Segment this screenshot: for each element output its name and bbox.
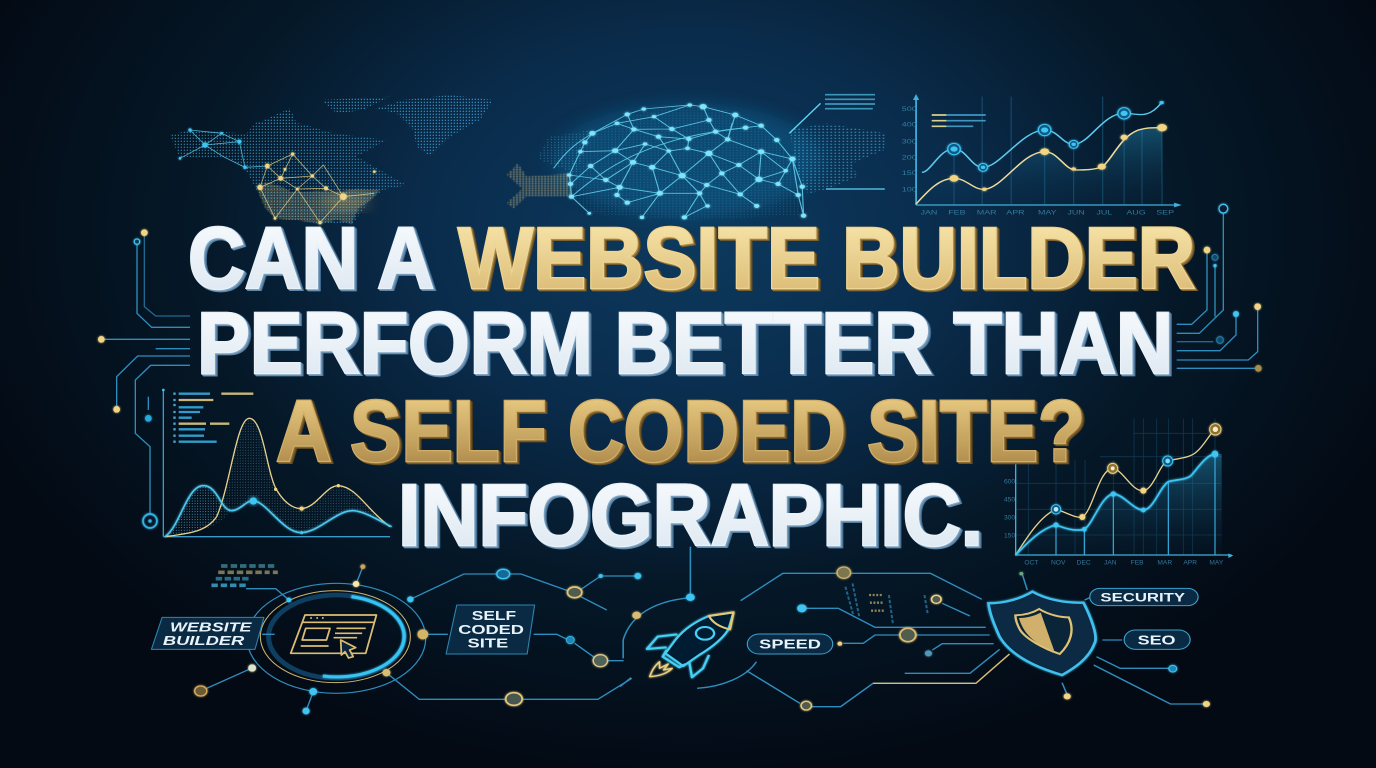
title line 1: CAN A	[188, 210, 434, 307]
label: website builder: BUILDER	[163, 633, 245, 648]
website builder hub	[151, 564, 641, 714]
line chart: top right: MAY	[1038, 209, 1057, 216]
rocket, speed and security section	[620, 547, 1210, 710]
line chart: top right: MAR	[977, 209, 997, 216]
line chart: top right: SEP	[1156, 209, 1174, 216]
title line 1: WEBSITE BUILDER	[458, 210, 1195, 307]
line chart: top right: 200	[902, 153, 917, 161]
line chart: lower right: 300	[1004, 514, 1015, 521]
line chart: lower right: APR	[1183, 560, 1197, 567]
line chart: top right: AUG	[1126, 209, 1146, 216]
label: website builder	[151, 617, 264, 649]
label: self coded site	[446, 605, 535, 654]
line chart: lower right: FEB	[1131, 560, 1144, 567]
data list: left chart	[173, 394, 253, 442]
label: seo: SEO	[1138, 632, 1176, 647]
label: security	[1090, 588, 1198, 606]
title	[188, 210, 1195, 564]
circuit: speed section	[620, 547, 1210, 710]
line chart: top right: APR	[1006, 209, 1025, 216]
line chart: top right: 400	[902, 121, 917, 128]
line chart: top right: FEB	[948, 209, 966, 216]
line chart: lower right: MAR	[1157, 560, 1172, 567]
line chart: top right: 300	[902, 137, 917, 145]
line chart: top right: JUN	[1067, 209, 1085, 216]
circuit: hub connections	[195, 564, 641, 714]
line chart: lower right: NOV	[1051, 560, 1066, 567]
label: seo	[1124, 630, 1190, 649]
icon: shield	[989, 592, 1096, 675]
line chart: top right: 100	[902, 186, 917, 193]
world map: North America network	[170, 95, 523, 224]
title line 3: A SELF CODED SITE?	[276, 383, 1085, 480]
small data grid	[211, 566, 278, 585]
title line 1	[188, 210, 1195, 307]
line chart: top right	[902, 94, 1182, 216]
line chart: lower right	[1004, 418, 1233, 567]
label: security: SECURITY	[1100, 590, 1185, 604]
wave chart: left	[162, 389, 392, 537]
circuit lines and nodes: right	[1177, 204, 1262, 372]
icon: rocket	[647, 612, 733, 677]
label: self coded site: SELF	[472, 608, 516, 623]
line chart: lower right: 450	[1004, 496, 1015, 503]
line chart: lower right: 150	[1004, 532, 1015, 539]
line chart: lower right: OCT	[1024, 560, 1038, 567]
label: speed: SPEED	[759, 637, 821, 651]
title line 2: PERFORM BETTER THAN	[197, 295, 1173, 392]
label: self coded site: SITE	[467, 636, 509, 651]
circuit lines and nodes: left	[98, 229, 190, 528]
line chart: top right: 500	[902, 105, 917, 113]
label: website builder: WEBSITE	[170, 620, 253, 634]
world map: Europe and Asia globe network	[507, 95, 886, 220]
label: self coded site: CODED	[458, 622, 524, 637]
line chart: lower right: MAY	[1209, 560, 1224, 567]
title line 4: INFOGRAPHIC.	[398, 467, 983, 564]
icon: browser window with cursor	[291, 615, 376, 658]
line chart: lower right: 600	[1004, 478, 1015, 485]
line chart: top right: 150	[902, 169, 917, 177]
line chart: top right: JAN	[921, 209, 938, 216]
Greenland	[377, 95, 493, 156]
line chart: lower right: JAN	[1104, 560, 1117, 567]
label: speed	[747, 634, 833, 654]
hub rings	[247, 583, 426, 693]
line chart: top right: JUL	[1096, 209, 1113, 216]
connection line	[382, 187, 523, 191]
line chart: lower right: DEC	[1077, 560, 1091, 567]
